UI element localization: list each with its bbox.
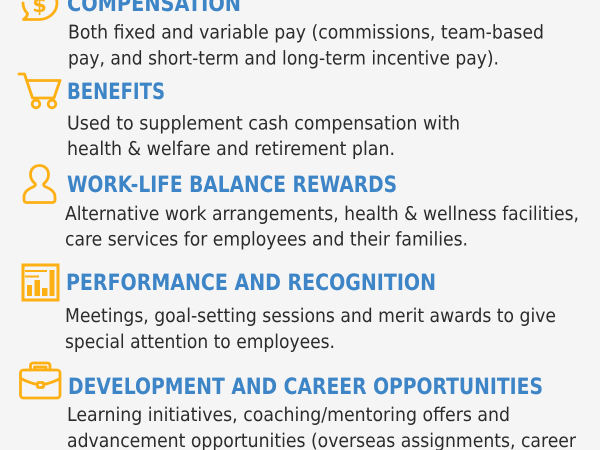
text: performance description: Meetings, goal-setting sessions and merit awards to give	[65, 305, 556, 327]
section: compensation	[23, 0, 544, 70]
text: work-life description	[65, 203, 579, 250]
text: benefits description: Used to supplement cash compensation with	[67, 112, 460, 134]
icon: bar chart in frame	[23, 265, 58, 300]
section: work-life balance rewards	[24, 166, 579, 250]
section: performance and recognition	[23, 265, 556, 353]
icon: speech bubble with dollar sign	[23, 0, 57, 20]
text: benefits description: health & welfare and retirement plan.	[67, 138, 395, 160]
text: compensation description: pay, and short-term and long-term incentive pay).	[68, 48, 499, 70]
heading: benefits: BENEFITS	[67, 79, 165, 105]
section: benefits	[19, 74, 460, 160]
text: development description: Learning initiatives, coaching/mentoring offers and	[67, 404, 510, 426]
text: performance description: special attention to employees.	[65, 331, 335, 353]
text: benefits description	[67, 112, 460, 160]
heading: work-life balance rewards: WORK-LIFE BALANCE REWARDS	[67, 172, 397, 198]
text: compensation description: Both fixed and variable pay (commissions, team-based	[68, 22, 544, 44]
icon: person outline	[24, 166, 55, 202]
icon: briefcase	[20, 363, 60, 398]
text: performance description	[65, 305, 556, 353]
text: development description	[67, 404, 576, 450]
icon: shopping cart	[19, 74, 60, 108]
text: compensation description	[68, 22, 544, 70]
section: development and career opportunities	[20, 363, 576, 450]
heading: performance and recognition: PERFORMANCE AND RECOGNITION	[66, 270, 436, 296]
text: work-life description: care services for employees and their families.	[65, 228, 468, 250]
